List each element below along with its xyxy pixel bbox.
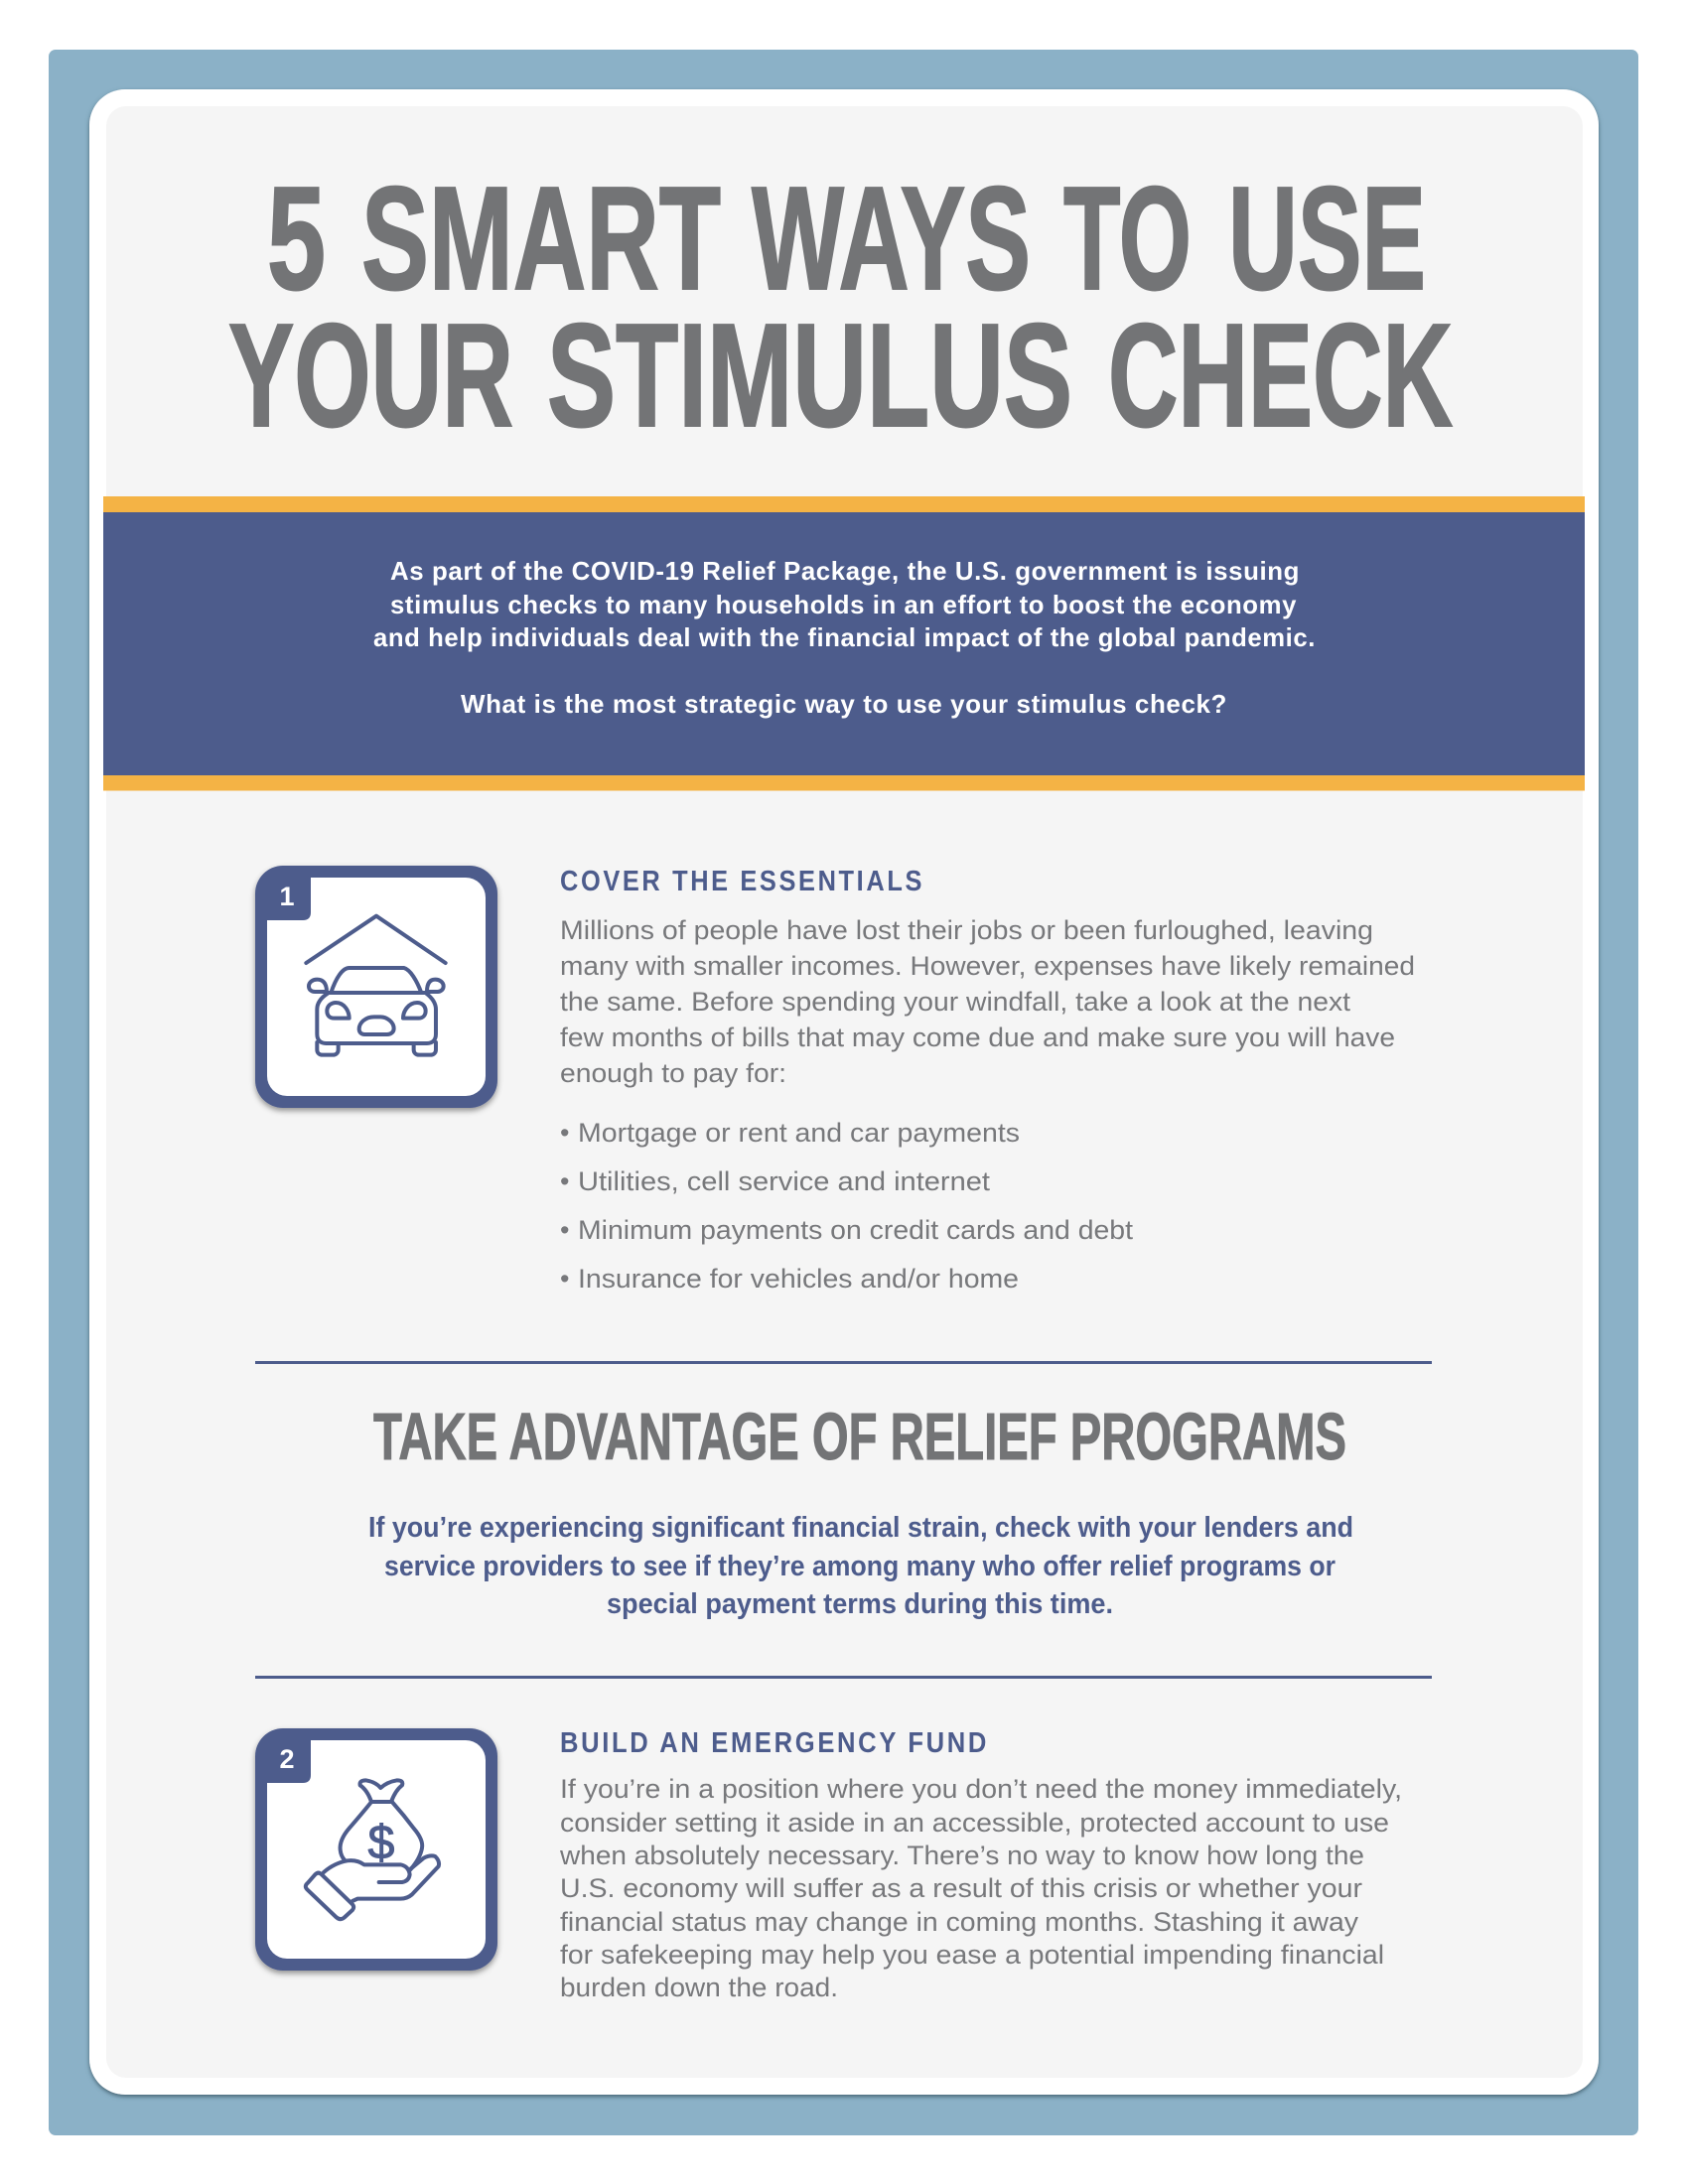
number badge 1: 1 <box>279 882 295 911</box>
title: YOUR <box>228 294 513 458</box>
intro text: As part of the COVID-19 Relief Package, the U.S. government is issuing <box>390 556 1300 586</box>
title: WAYS <box>752 157 1031 321</box>
text block: section 2 body: for safekeeping may help you ease a potential impending financial <box>560 1940 1384 1970</box>
title <box>228 157 1453 458</box>
text block: relief programs: If you’re experiencing significant financial strain, check with your lenders and <box>368 1512 1353 1544</box>
icon: money bag in hand: $ <box>368 1816 395 1869</box>
text block: section 1 body: the same. Before spending your windfall, take a look at the next <box>560 987 1351 1017</box>
title: USE <box>1228 157 1426 321</box>
text block: section 2 body: financial status may change in coming months. Stashing it away <box>560 1907 1359 1937</box>
text block: section 1 body: enough to pay for: <box>560 1058 786 1088</box>
text block: section 1 body <box>560 915 1415 1088</box>
grey content panel <box>106 106 1583 2078</box>
number badge 2 <box>267 1736 311 1783</box>
title: SMART <box>361 157 721 321</box>
intro text <box>373 556 1316 719</box>
list: essentials bullets: • <box>560 1215 569 1245</box>
text block: relief programs: special payment terms during this time. <box>607 1588 1113 1620</box>
intro text: stimulus checks to many households in an effort to boost the economy <box>390 590 1297 619</box>
panel: section 2 icon box <box>255 1728 497 1971</box>
panel: intro banner <box>103 496 1585 790</box>
text block: section 2 body: burden down the road. <box>560 1973 838 2002</box>
title: STIMULUS <box>547 294 1072 458</box>
text block: section 2 body: U.S. economy will suffer as a result of this crisis or whether your <box>560 1873 1362 1903</box>
list: essentials bullets: Mortgage or rent and car payments <box>578 1118 1020 1148</box>
list: essentials bullets: • <box>560 1166 569 1196</box>
text block: relief programs <box>368 1512 1353 1620</box>
text block: relief programs: service providers to see if they’re among many who offer relief programs or <box>384 1551 1336 1582</box>
list: essentials bullets: Insurance for vehicles and/or home <box>578 1264 1019 1294</box>
number badge 1 <box>267 874 311 920</box>
text block: section 2 body: when absolutely necessary. There’s no way to know how long the <box>559 1841 1364 1870</box>
heading: cover the essentials: COVER THE ESSENTIALS <box>560 866 924 897</box>
heading: build an emergency fund: BUILD AN EMERGENCY FUND <box>560 1727 989 1759</box>
intro text: and help individuals deal with the financial impact of the global pandemic. <box>373 622 1316 652</box>
text block: section 2 body: If you’re in a position where you don’t need the money immediately, <box>560 1774 1402 1804</box>
title: CHECK <box>1108 294 1453 458</box>
list: essentials bullets: • <box>560 1118 569 1148</box>
panel: section 1 icon box <box>255 866 497 1108</box>
icon: money bag in hand <box>306 1780 439 1919</box>
title: TO <box>1063 157 1192 321</box>
intro text: What is the most strategic way to use your stimulus check? <box>461 689 1227 719</box>
text block: section 1 body: few months of bills that may come due and make sure you will have <box>560 1023 1395 1052</box>
list: essentials bullets: Utilities, cell service and internet <box>578 1166 991 1196</box>
icon: car in garage <box>306 916 446 1055</box>
list: essentials bullets: • <box>560 1264 569 1294</box>
text block: section 2 body: consider setting it aside in an accessible, protected account to use <box>560 1808 1389 1838</box>
text block: section 1 body: Millions of people have lost their jobs or been furloughed, leaving <box>560 915 1373 945</box>
text block: section 1 body: many with smaller incomes. However, expenses have likely remained <box>560 951 1415 981</box>
text block: section 2 body <box>559 1774 1402 2002</box>
number badge 2: 2 <box>279 1744 295 1774</box>
title: 5 <box>267 157 326 321</box>
list: essentials bullets <box>560 1118 1134 1294</box>
list: essentials bullets: Minimum payments on credit cards and debt <box>578 1215 1134 1245</box>
